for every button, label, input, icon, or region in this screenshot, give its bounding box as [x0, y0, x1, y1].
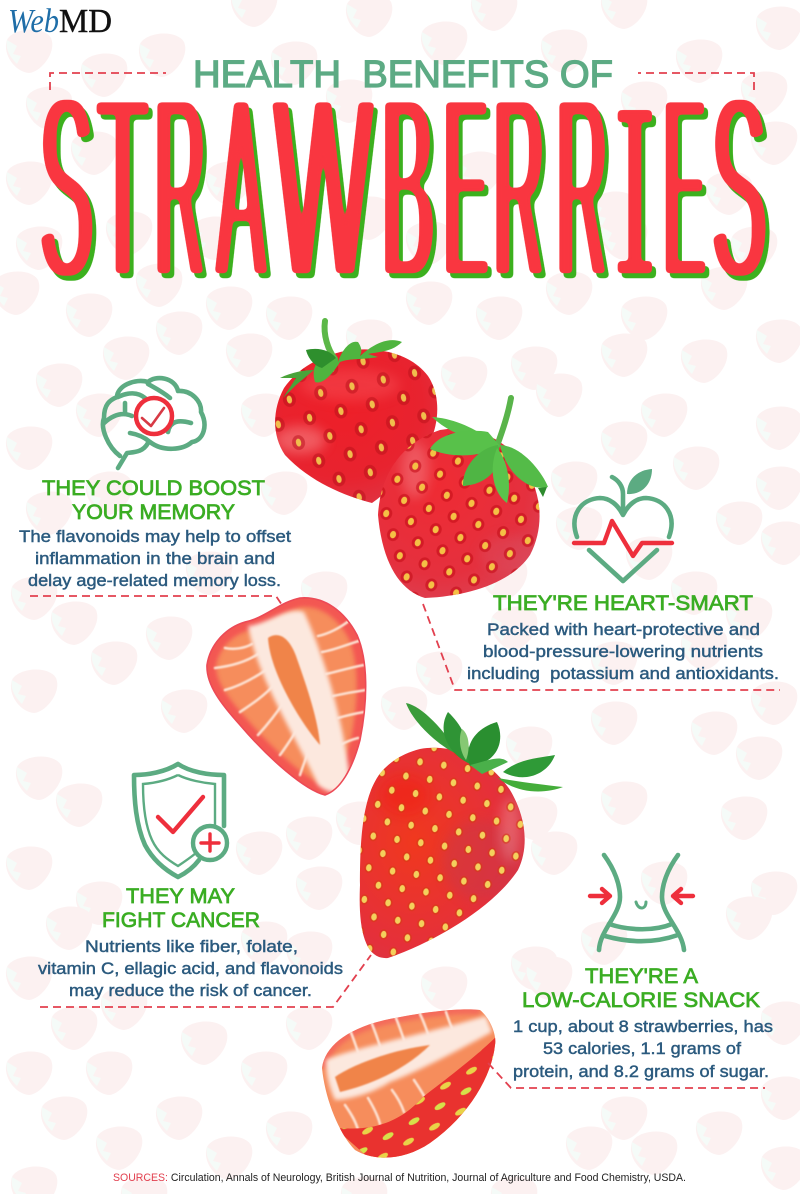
text: snack: 1 cup, about 8 strawberries, has — [513, 1017, 773, 1036]
panel: snack — [488, 855, 773, 1088]
connector: cancer — [40, 955, 371, 1007]
text: snack — [513, 1017, 773, 1081]
connector: snack — [488, 1063, 765, 1088]
text: heart — [467, 620, 779, 683]
text: cancer: Nutrients like fiber, folate, — [85, 937, 298, 956]
icon: apple heart — [574, 469, 672, 581]
strawberry: upper cut half — [206, 597, 366, 796]
text: cancer — [38, 937, 343, 1000]
text: cancer: may reduce the risk of cancer. — [69, 981, 312, 1000]
title: strawberries: A — [217, 44, 265, 333]
WebMD logo: Web — [8, 3, 59, 40]
icon: shield — [134, 764, 227, 877]
text: snack: protein, and 8.2 grams of sugar. — [513, 1062, 769, 1081]
text: memory: delay age-related memory loss. — [28, 571, 281, 590]
text: heart: Packed with heart-protective and — [487, 620, 760, 639]
heading: snack: LOW-CALORIE SNACK — [522, 988, 761, 1012]
text: heart: including potassium and antioxidants. — [467, 664, 779, 683]
panel: memory — [19, 378, 291, 605]
text: memory — [19, 527, 291, 590]
title: strawberries: I — [614, 61, 656, 355]
title: strawberries: E — [444, 44, 487, 333]
title: strawberries: R — [494, 43, 544, 333]
title: strawberries: B — [382, 43, 434, 333]
title: strawberries: S — [40, 43, 93, 332]
text: memory: inflammation in the brain and — [35, 549, 275, 568]
icon: waist — [590, 855, 693, 950]
title: strawberries — [40, 42, 766, 355]
text: memory: The flavonoids may help to offset — [19, 527, 291, 546]
heading: heart: THEY'RE HEART-SMART — [493, 591, 753, 615]
connector: memory — [30, 596, 282, 605]
title: strawberries: R — [557, 43, 607, 333]
WebMD logo: MD — [59, 3, 112, 40]
title: strawberries: S — [712, 42, 766, 332]
connector: heart — [423, 604, 780, 690]
title: strawberries: R — [155, 43, 205, 333]
text: cancer: vitamin C, ellagic acid, and flavonoids — [38, 959, 343, 978]
WebMD logo — [8, 3, 112, 40]
strawberry: top left whole berry — [275, 318, 438, 503]
strawberry: top right whole berry — [370, 398, 550, 605]
heading: memory — [42, 476, 265, 524]
text: heart: blood-pressure-lowering nutrients — [483, 642, 763, 661]
icon: brain with check — [103, 378, 204, 468]
heading: memory: YOUR MEMORY — [72, 500, 235, 524]
title: strawberries: E — [664, 43, 705, 332]
strawberry: lower cut half — [322, 1009, 496, 1158]
subtitle: health benefits of: HEALTH BENEFITS OF — [193, 54, 613, 96]
title bracket dashes — [50, 73, 754, 90]
sources: SOURCES: Circulation, Annals of Neurology, British Journal of Nutrition, Journal of Agriculture and Food Chemistry, USDA. — [113, 1172, 686, 1184]
heading: snack — [522, 964, 761, 1012]
heading: cancer: THEY MAY — [126, 884, 235, 908]
heading: memory: THEY COULD BOOST — [42, 476, 265, 500]
heading: cancer: FIGHT CANCER — [102, 908, 260, 932]
heading: cancer — [102, 884, 260, 932]
strawberry: centre whole berry — [350, 703, 563, 965]
text: snack: 53 calories, 1.1 grams of — [543, 1039, 741, 1058]
panel: heart — [423, 469, 780, 690]
title: strawberries: T — [98, 42, 147, 332]
panel: cancer — [38, 764, 371, 1007]
heading: snack: THEY'RE A — [585, 964, 699, 988]
title: strawberries: W — [274, 42, 372, 332]
